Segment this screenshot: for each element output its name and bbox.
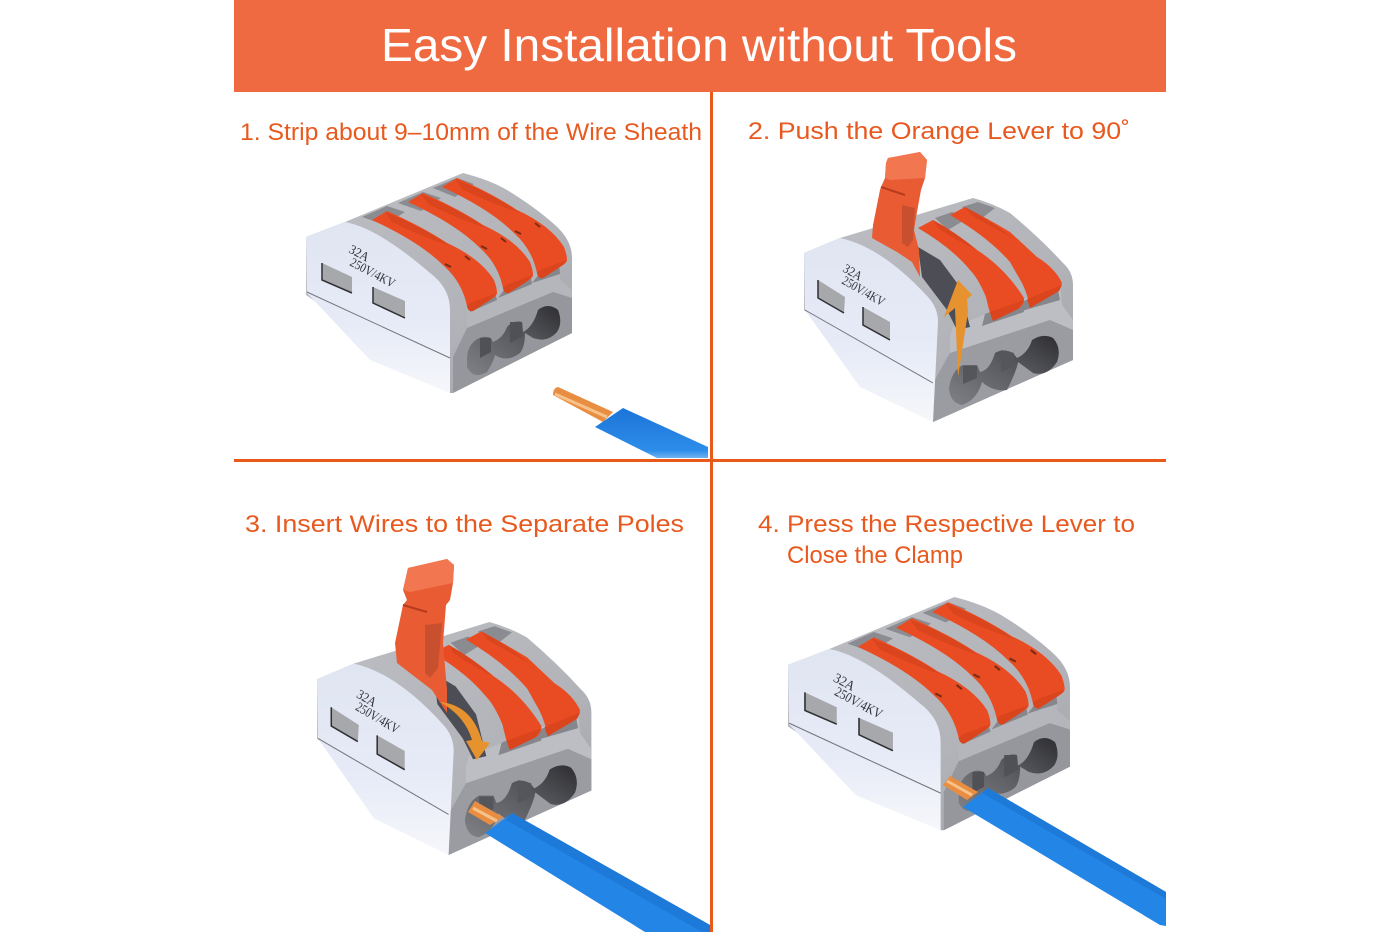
- title: Easy Installation without Tools: [381, 19, 1017, 71]
- step 3 heading: 3. Insert Wires to the Separate Poles: [245, 511, 684, 538]
- connector with raised lever: 32A: [354, 686, 380, 710]
- connector holes: [949, 336, 1059, 405]
- connector with raised lever: 250V/4KV: [353, 699, 402, 737]
- inserted wire: [943, 776, 1166, 926]
- connector with closed levers: [788, 597, 1070, 830]
- connector with raised lever: [804, 152, 1073, 422]
- raised lever: [872, 152, 927, 277]
- arrow: lever rotation: [440, 702, 490, 760]
- header banner: [234, 0, 1166, 92]
- panel: step 3: [245, 511, 710, 932]
- panel: step 2: [748, 118, 1130, 422]
- connector with closed levers: 32A: [347, 241, 373, 265]
- step 1 heading: 1. Strip about 9–10mm of the Wire Sheath: [240, 119, 702, 146]
- step 2 heading: 2. Push the Orange Lever to 90˚: [748, 118, 1130, 145]
- inserted wire: [468, 801, 710, 932]
- connector with raised lever: 250V/4KV: [840, 273, 888, 309]
- connector with raised lever: [317, 559, 591, 855]
- stripped wire: [553, 387, 708, 458]
- connector with closed levers: 250V/4KV: [348, 254, 398, 291]
- raised lever: [395, 559, 454, 713]
- panel: step 4: [758, 511, 1166, 926]
- step 4 heading: [758, 511, 1135, 569]
- step 4 heading: Close the Clamp: [787, 542, 963, 569]
- connector holes: [467, 306, 560, 375]
- arrow: lift lever: [944, 280, 972, 377]
- connector with raised lever: 32A: [840, 261, 866, 284]
- step 4 heading: 4. Press the Respective Lever to: [758, 511, 1135, 538]
- grid dividers: [234, 92, 1166, 932]
- connector with closed levers: [306, 173, 572, 393]
- connector with closed levers: 32A: [831, 670, 858, 694]
- connector with closed levers: 250V/4KV: [832, 684, 885, 722]
- panel: step 1: [240, 119, 708, 458]
